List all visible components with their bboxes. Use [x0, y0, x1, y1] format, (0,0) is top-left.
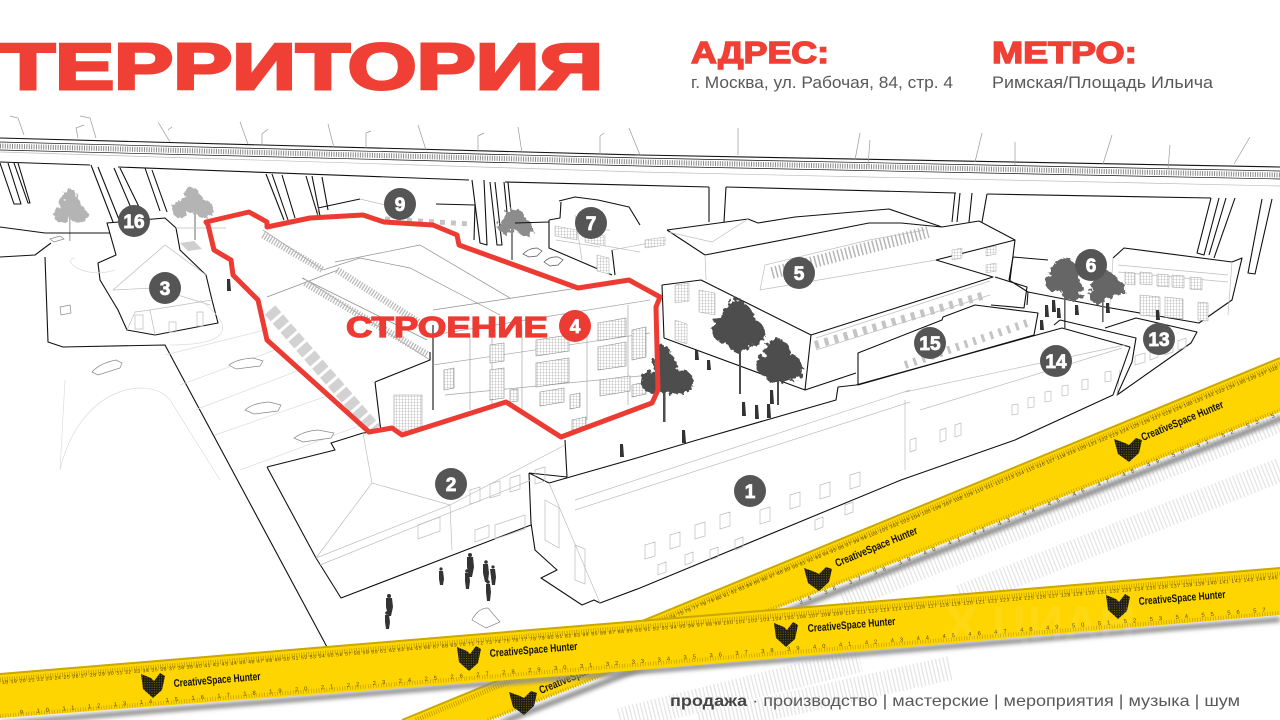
measuring tape: diagonal: 35 36 37 38 39 40 41 42 43 44 45 46 47 48 49 50 51 52 53 54	[799, 409, 1280, 606]
badges: building numbers: 15	[919, 334, 941, 355]
lamp posts	[10, 116, 1250, 170]
badges: building numbers: 14	[1045, 352, 1067, 373]
measuring tape: diagonal: CreativeSpace Hunter	[538, 652, 624, 697]
badges: building numbers	[118, 188, 1175, 507]
building 7 outline	[515, 197, 666, 275]
icon: trees background	[54, 187, 533, 260]
parking cars near building 7	[523, 248, 563, 266]
building 6 outline	[1009, 248, 1242, 323]
badges: building numbers: 16	[123, 212, 145, 233]
parking lines and cars	[50, 236, 500, 628]
icon: tape logos	[141, 594, 1130, 698]
building 4 interior	[263, 230, 650, 432]
measuring tape: diagonal: CreativeSpace Hunter	[1140, 399, 1226, 444]
measuring tape: long: CreativeSpace Hunter	[807, 616, 896, 635]
facade windows	[394, 395, 422, 431]
badges: building numbers: 5	[794, 264, 805, 285]
trees building 6	[1046, 257, 1125, 328]
badges: building numbers: 13	[1148, 330, 1170, 351]
metro block	[992, 35, 1214, 92]
metro block: МЕТРО:	[992, 35, 1137, 70]
measuring tape: long: CreativeSpace Hunter	[173, 671, 261, 690]
measuring tape: long: CreativeSpace Hunter	[1138, 589, 1226, 608]
measuring tape: long: 18 19 20 21 22 23 24 25 26 27 28 29 30 31 32 33 34 35 36 37 38 39 40 41 42 43 44 45 46 47 48 49 50 51 52 53 54 55 56 57 58 59 60 61 62 63 64 65 66 67 68 69 70 71 72 73 74 75 76 77 78 79 80 81 82 83 84 85 86 87 88 89 90 91 92 93 94 95 96 97 98 99 100 101 102 103 104 105 106 107 108 109 110 111 112 113 114 115 116 117 118 119 120 121 122 123 124 125 126 127 128 129 130 131 132 133 134 135 136 137 138 139 140 141 142 143 144 145	[2, 575, 1278, 686]
icon: tape logos	[509, 438, 1142, 715]
address block: АДРЕС:	[691, 35, 829, 70]
building 14 and 1 outline	[529, 328, 1130, 605]
address block	[691, 35, 953, 92]
people silhouettes	[227, 279, 1160, 629]
badges: building numbers: 7	[586, 214, 596, 235]
building 5 outline	[662, 209, 1027, 390]
watermark: Х ЦИАН	[945, 598, 1135, 651]
label: building 4: СТРОЕНИЕ	[346, 312, 548, 344]
badges: building numbers: 6	[1086, 256, 1096, 277]
trees center	[641, 298, 803, 422]
building 2 outline	[267, 430, 567, 598]
pillars	[0, 163, 1272, 274]
footer tagline: продажа · производство | мастерские | мероприятия | музыка | шум	[670, 693, 1240, 710]
badges: building numbers: 9	[395, 195, 405, 216]
building 13 outline	[1054, 318, 1197, 395]
railway tracks	[620, 420, 1280, 720]
badges: building numbers: 1	[745, 482, 756, 503]
label: building 4: 4	[570, 317, 581, 338]
overpass	[0, 116, 1280, 274]
label: building 4	[346, 310, 591, 344]
measuring tape: long: 9 10 11 12 13 14 15 16 17 18 19 20 21 22 23 24 25 26 27 28 29 30 31 32 33 34 35 36 37 38 39 40 41 42 43 44 45 46 47 48 49 50 51 52 53 54 55 56 57	[20, 608, 1266, 716]
measuring tape: long: CreativeSpace Hunter	[489, 641, 578, 660]
metro block: Римская/Площадь Ильича	[992, 74, 1214, 92]
measuring tape: diagonal: CreativeSpace Hunter	[834, 525, 920, 570]
measuring tape: diagonal: 70 71 72 73 74 75 76 77 78 79 80 81 82 83 84 85 86 87 88 89 90 91 92 93 94 95 96 97 98 99 100 101 102 103 104 105 106 107 108 109 110 111 112 113 114 115 116 117 118 119 120 121 122 123 124 125 126 127 128 129 130 131 132 133 134 135 136 137 138	[638, 365, 1279, 634]
badges: building numbers: 3	[160, 279, 170, 300]
badges: building numbers: 2	[446, 475, 456, 496]
address block: г. Москва, ул. Рабочая, 84, стр. 4	[691, 74, 953, 92]
title: ТЕРРИТОРИЯ	[1, 30, 603, 103]
building 15 outline	[858, 305, 1038, 385]
building 4 highlight outline	[206, 212, 660, 437]
building 9 outline	[318, 199, 475, 240]
measuring tape: diagonal	[402, 358, 1280, 720]
building 16 and 3 outline	[0, 218, 327, 647]
